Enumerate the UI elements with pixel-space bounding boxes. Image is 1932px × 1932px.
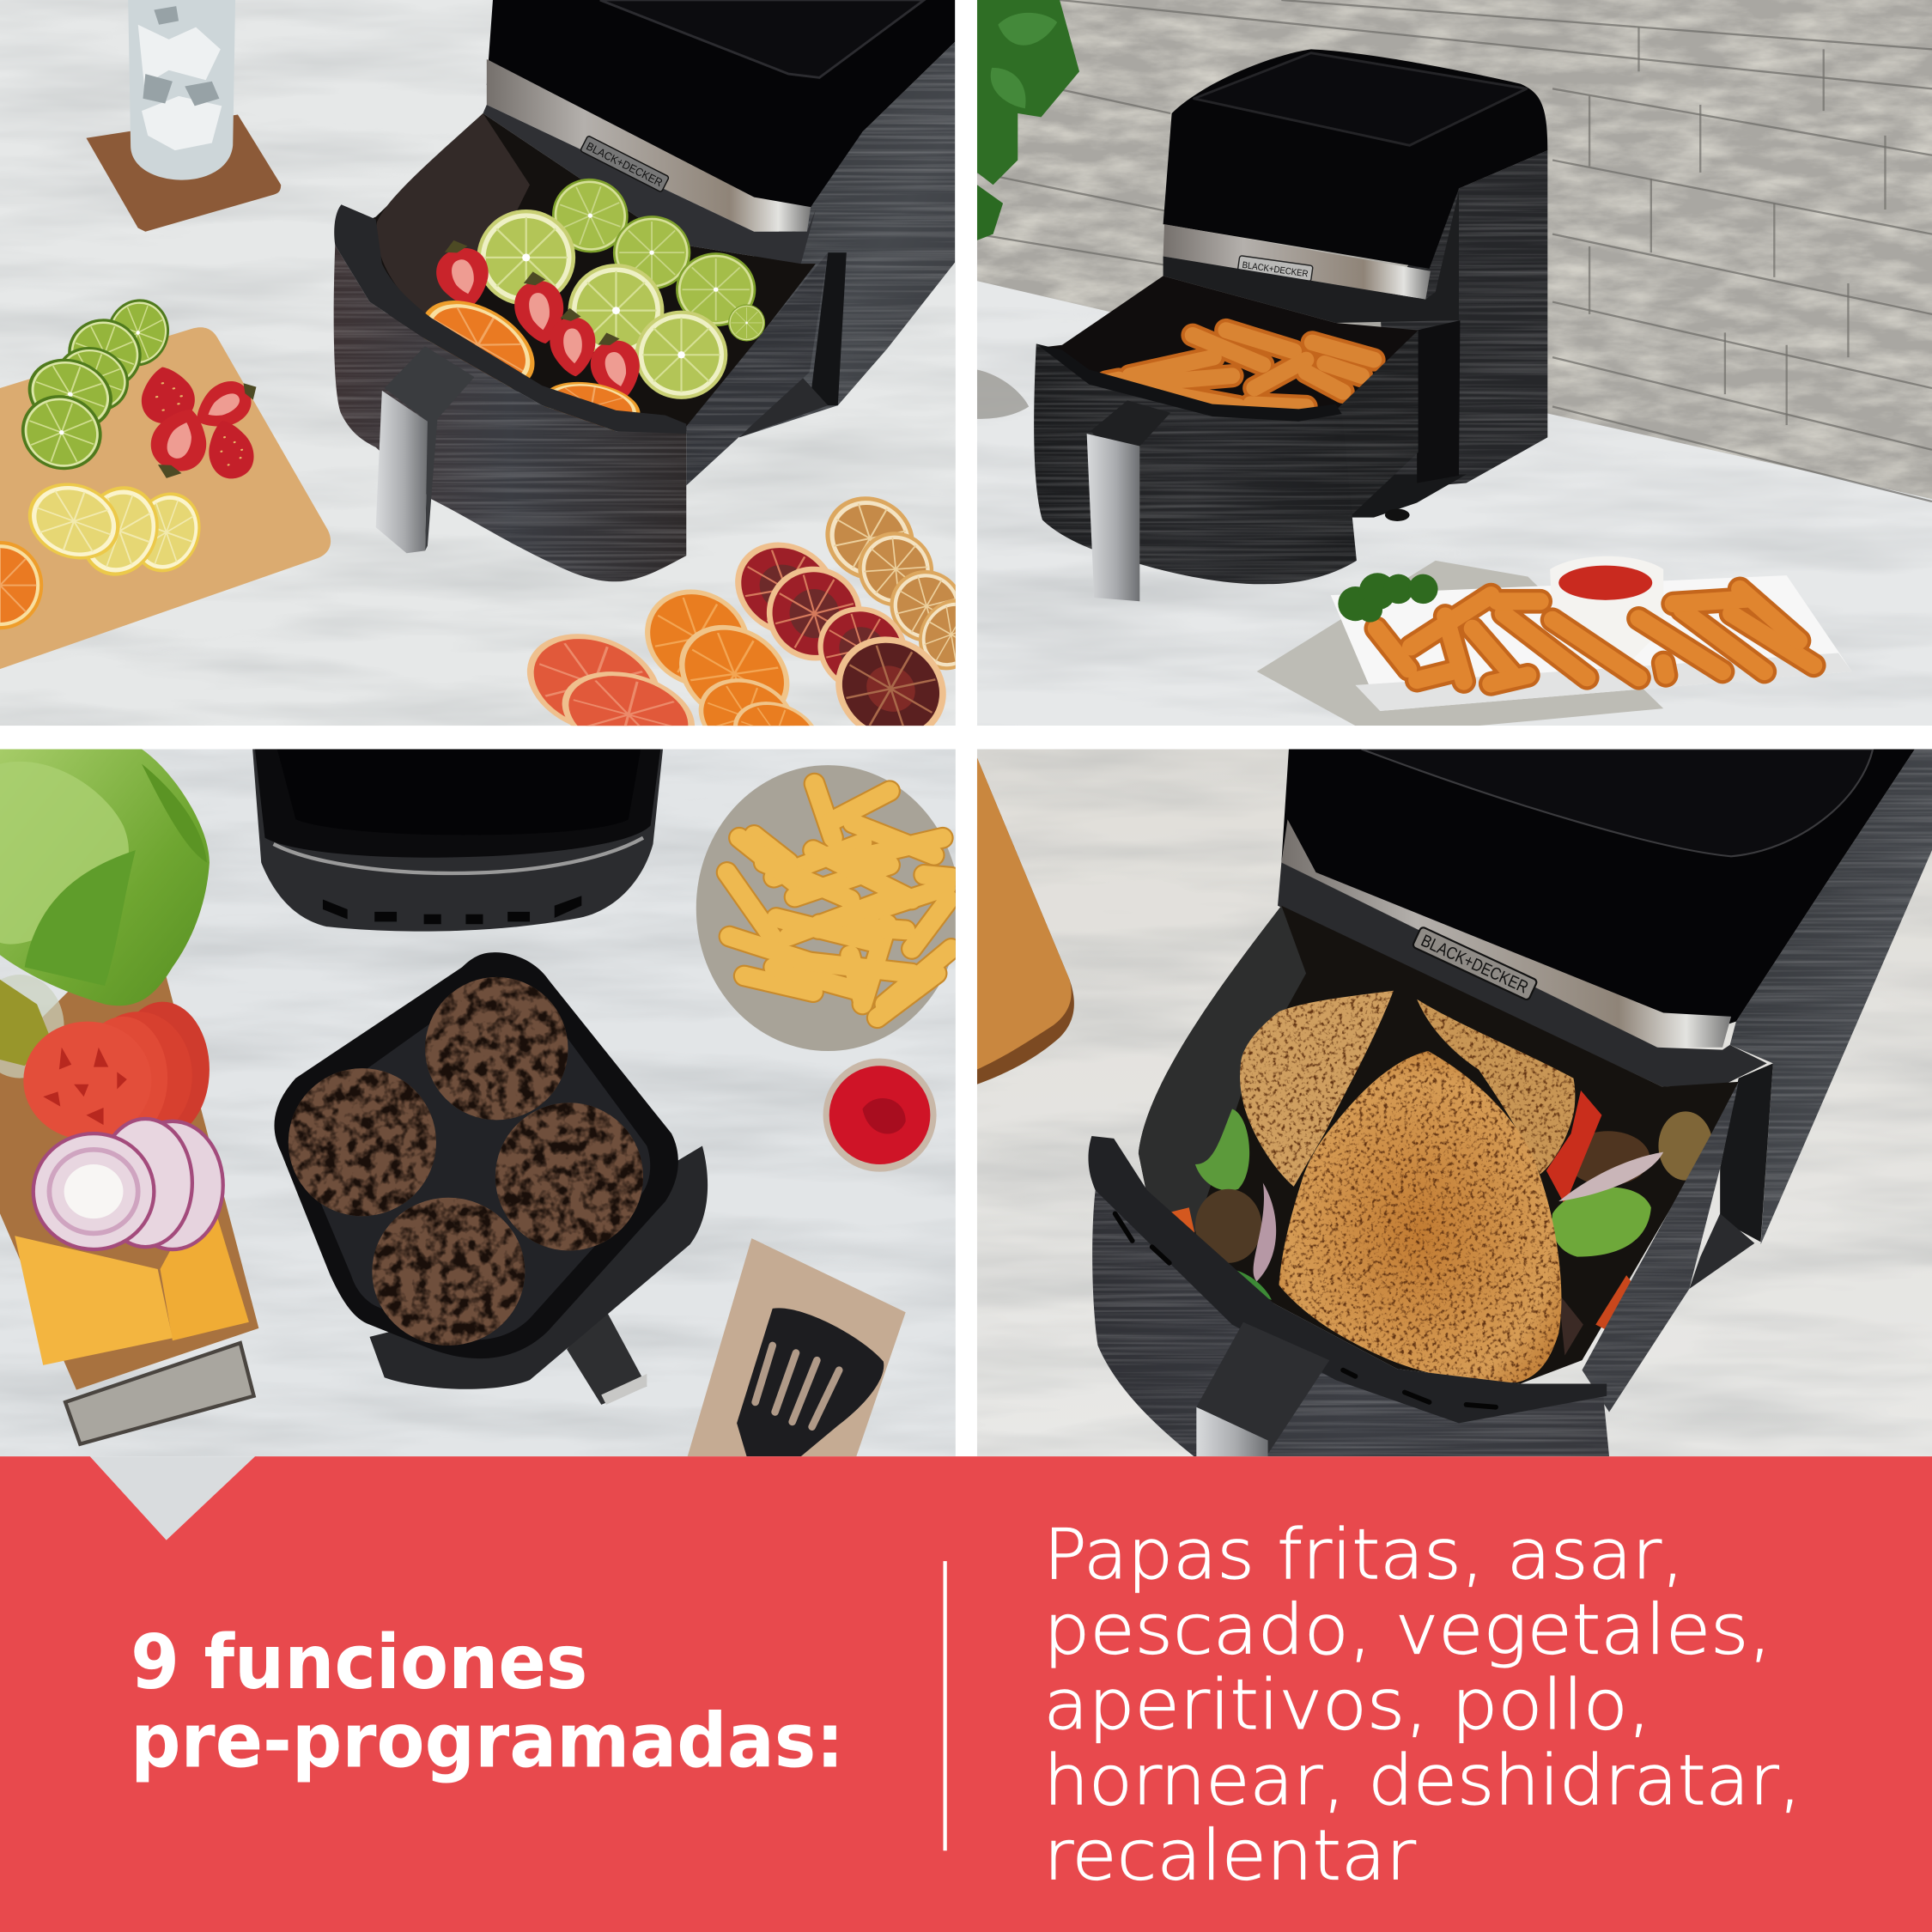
panel: roast chicken in air fryer: [977, 749, 1932, 1456]
function list: hornear, deshidratar,: [1043, 1740, 1801, 1820]
red banner: [0, 1456, 1932, 1932]
marble counter background: [0, 0, 957, 726]
basket with patties: [274, 952, 708, 1405]
air fryer body: [483, 0, 955, 437]
air fryer unit: BLACK+DECKER: [1418, 932, 1531, 998]
panel: mozzarella sticks in air fryer: [977, 0, 1932, 726]
function list: pescado, vegetales,: [1043, 1589, 1771, 1670]
coaster: [86, 114, 281, 232]
strawberries: [141, 368, 256, 479]
vegetables: [1164, 1091, 1713, 1355]
divider: [943, 1561, 947, 1850]
function list: recalentar: [1043, 1814, 1416, 1895]
dried citrus slices: [527, 496, 956, 726]
air fryer unit: [1163, 49, 1547, 521]
ketchup cup: [823, 1059, 937, 1172]
wood board: [0, 977, 258, 1390]
cutting board: [0, 327, 331, 669]
marble counter: [977, 749, 1932, 1456]
lime slices: [21, 299, 170, 471]
plate of mozzarella sticks with sauce: [1257, 556, 1852, 726]
plate of fries: [696, 765, 960, 1051]
towel: [688, 1238, 906, 1456]
panel: dehydrated citrus in air fryer: [0, 0, 956, 726]
cheese slices: [15, 1183, 249, 1365]
tomato slices: [23, 1002, 210, 1139]
heading: pre-programadas:: [131, 1698, 844, 1785]
metal tray: [65, 1343, 254, 1444]
basket interior with chicken and vegetables: [1139, 906, 1739, 1383]
panel: burgers and fries overhead: [0, 749, 960, 1456]
marble notch under banner: [90, 1456, 255, 1540]
drawer interior and fruit: [335, 113, 816, 438]
lemon slices: [0, 483, 201, 630]
heading: 9 funciones: [131, 1619, 587, 1706]
drawer front and handle: [334, 204, 828, 581]
cutting board: [977, 757, 1074, 1084]
air fryer unit: BLACK+DECKER: [1242, 260, 1309, 279]
stone wall and counter: [977, 0, 1932, 726]
fryer basket with sticks: [1034, 276, 1419, 601]
red onion slices: [33, 1119, 223, 1249]
glass of sparkling water: [128, 0, 235, 180]
air fryer unit: [1278, 749, 1932, 1289]
air fryer seen from above: [252, 749, 663, 932]
marble counter: [0, 749, 957, 1456]
pickles jar: [0, 975, 64, 1078]
function list: Papas fritas, asar,: [1043, 1514, 1685, 1595]
basil plant: [977, 0, 1079, 240]
spatula: [737, 1308, 884, 1456]
drawer front and handle: [1088, 1082, 1739, 1456]
lettuce: [0, 749, 210, 1005]
logo: BLACK+DECKER: [584, 139, 665, 189]
function list: aperitivos, pollo,: [1043, 1664, 1651, 1745]
roast chicken: [1240, 991, 1575, 1382]
